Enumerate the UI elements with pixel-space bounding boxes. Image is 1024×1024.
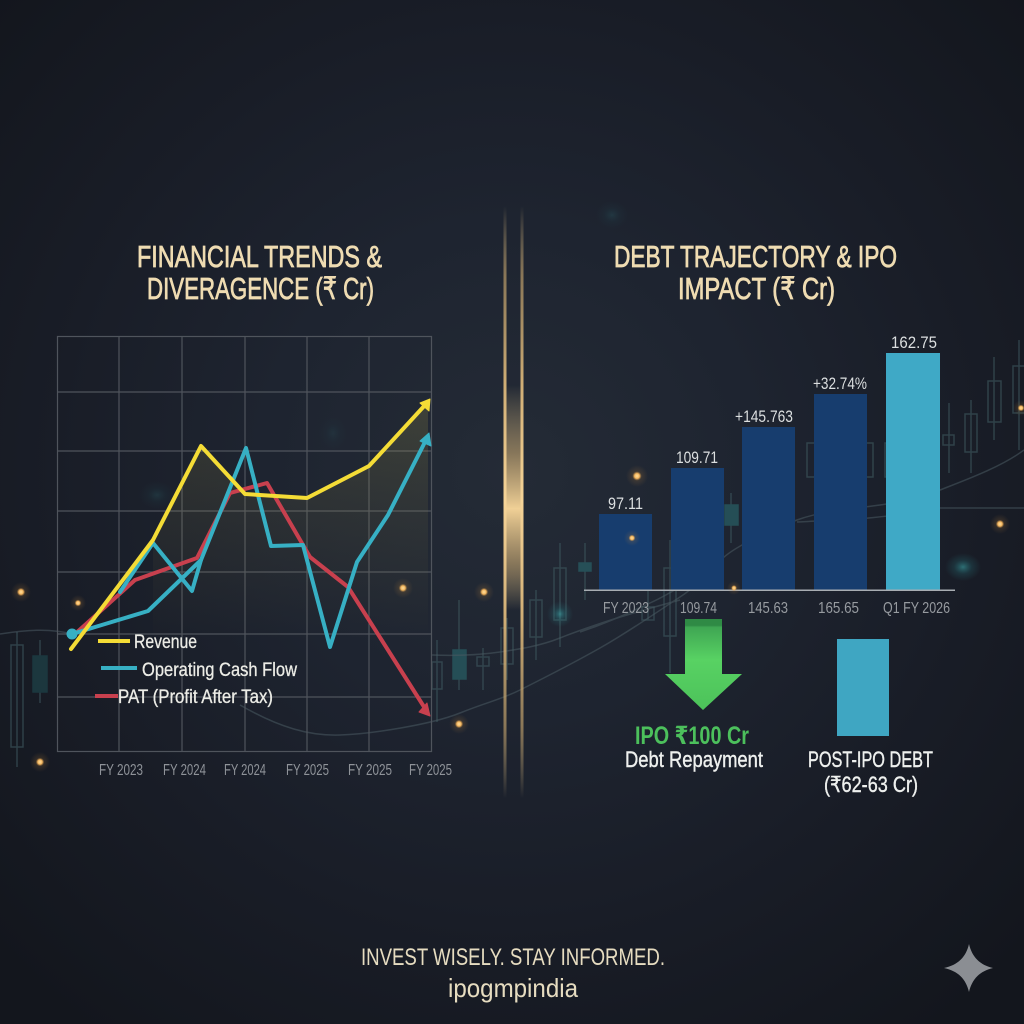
title: debt trajectory: [614, 239, 897, 306]
chart grid: [57, 336, 432, 752]
glowing particles: [11, 201, 1024, 772]
line chart: financial trends: [57, 336, 452, 779]
callout: IPO repayment: Debt Repayment: [625, 747, 763, 772]
callout: post-IPO debt: (₹62-63 Cr): [824, 772, 918, 797]
background candlesticks: [11, 340, 1024, 767]
legend: [95, 632, 297, 708]
category labels: [603, 600, 950, 617]
x axis labels: FY 2023: [99, 762, 143, 779]
legend: Operating Cash Flow: [142, 660, 297, 681]
bar chart: debt trajectory: [584, 333, 955, 617]
x axis labels: FY 2025: [348, 762, 392, 779]
footer tagline: ipogmpindia: [448, 973, 578, 1003]
title: debt trajectory: IMPACT (₹ Cr): [678, 271, 835, 306]
bar: post-IPO debt: [837, 639, 889, 736]
category labels: Q1 FY 2026: [883, 600, 950, 617]
bars: [599, 353, 940, 590]
legend: Revenue: [134, 632, 197, 653]
footer tagline: INVEST WISELY. STAY INFORMED.: [361, 944, 665, 971]
category labels: 109.74: [680, 600, 717, 617]
category labels: 165.65: [818, 600, 859, 617]
line: PAT: [75, 483, 430, 716]
value labels: [608, 333, 937, 513]
line: operating cash flow: [68, 433, 431, 647]
baseline: [584, 590, 955, 591]
title: financial trends: [137, 239, 382, 306]
title: financial trends: FINANCIAL TRENDS &: [137, 239, 382, 274]
revenue area fill: [153, 402, 428, 640]
footer tagline: [361, 944, 665, 1003]
line: revenue: [71, 399, 430, 649]
value labels: +32.74%: [813, 374, 867, 393]
category labels: 145.63: [748, 600, 788, 617]
callout: post-IPO debt: [808, 747, 933, 797]
x axis labels: FY 2024: [224, 762, 266, 779]
central gold divider: [504, 206, 524, 798]
value labels: 109.71: [676, 448, 718, 467]
value labels: 97.11: [608, 494, 643, 513]
callout: post-IPO debt: POST-IPO DEBT: [808, 747, 933, 772]
title: debt trajectory: DEBT TRAJECTORY & IPO: [614, 239, 897, 274]
value labels: 162.75: [891, 333, 937, 352]
background trend curves: [0, 450, 1024, 735]
icon: sparkle: [944, 944, 993, 992]
x axis labels: FY 2024: [163, 762, 206, 779]
callout: IPO repayment: [625, 722, 763, 772]
x axis labels: [99, 762, 452, 779]
value labels: +145.763: [735, 407, 793, 426]
legend: PAT (Profit After Tax): [118, 687, 273, 708]
category labels: FY 2023: [603, 600, 649, 617]
title: financial trends: DIVERAGENCE (₹ Cr): [147, 271, 374, 306]
x axis labels: FY 2025: [409, 762, 452, 779]
callout: IPO repayment: IPO ₹100 Cr: [635, 722, 749, 750]
arrow: debt repayment: [665, 619, 742, 710]
x axis labels: FY 2025: [286, 762, 329, 779]
